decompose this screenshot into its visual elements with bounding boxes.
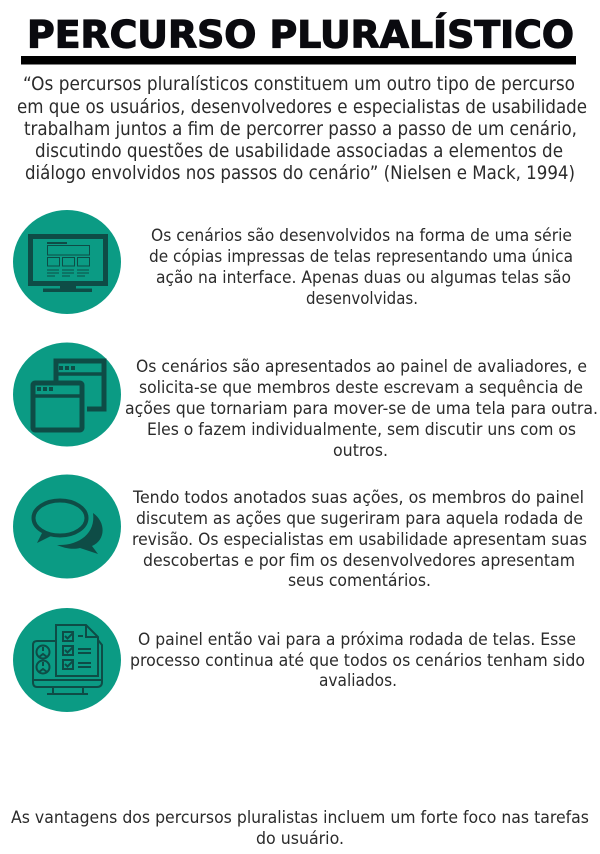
step 4 text [130, 630, 585, 690]
icon: computer with checklist and profiles [13, 608, 121, 712]
footer text: do usuário. [256, 829, 344, 848]
quote text block [17, 74, 587, 184]
step 3 text: descobertas e por fim os desenvolvedores apresentam [143, 551, 575, 570]
step 3 text [132, 488, 587, 590]
step 3 text: Tendo todos anotados suas ações, os membros do painel [132, 488, 584, 507]
step 1 text: de cópias impressas de telas representando uma única [149, 247, 573, 266]
step 1 text: ação na interface. Apenas duas ou algumas telas são [156, 268, 571, 287]
step 2 text [125, 357, 598, 460]
footer text [11, 808, 589, 848]
step 1 text: desenvolvidas. [306, 289, 418, 308]
icon: speech bubbles [13, 474, 121, 578]
step 2 text: Os cenários são apresentados ao painel de avaliadores, e [136, 357, 587, 376]
step 2 text: outros. [333, 441, 388, 460]
step 4 text: avaliados. [319, 671, 397, 690]
step 2 text: solicita-se que membros deste escrevam a sequência de [139, 378, 583, 397]
step 4 text: processo continua até que todos os cenários tenham sido [130, 651, 585, 670]
step 4 text: O painel então vai para a próxima rodada de telas. Esse [138, 630, 576, 649]
step 3 text: revisão. Os especialistas em usabilidade apresentam suas [132, 530, 587, 549]
step 3 text: discutem as ações que sugeriram para aquela rodada de [136, 509, 583, 528]
step 2 text: Eles o fazem individualmente, sem discutir uns com os [147, 420, 576, 439]
step 1 text: Os cenários são desenvolvidos na forma de uma série [151, 226, 572, 245]
icon: overlapping windows [13, 342, 121, 446]
step 3 text: seus comentários. [288, 571, 431, 590]
icon: monitor with screen layout [13, 210, 121, 314]
step 1 text [149, 226, 573, 308]
title: PERCURSO PLURALÍSTICO [27, 12, 574, 56]
